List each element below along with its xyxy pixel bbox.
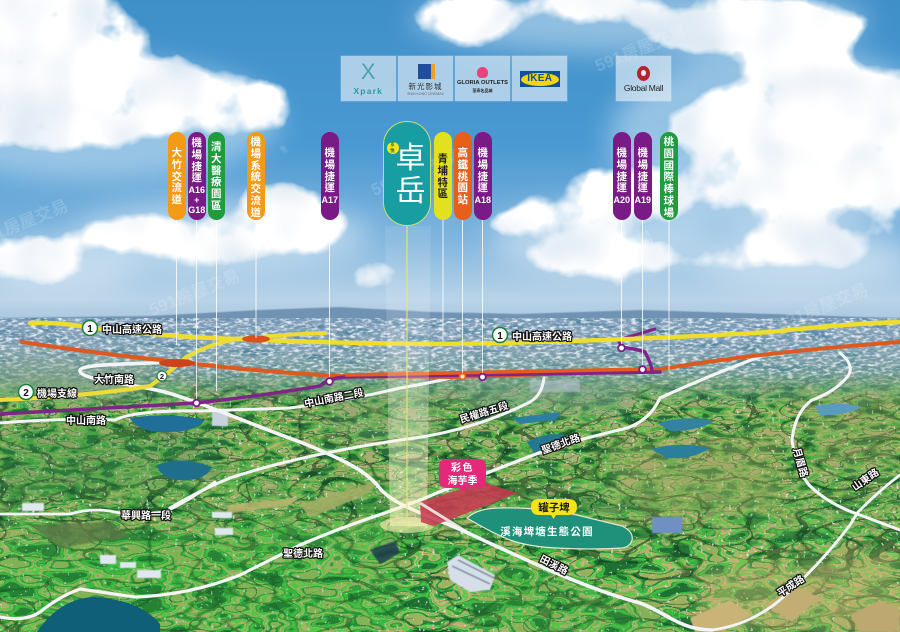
label: 機場捷運 A16+G18: 機 [192, 137, 202, 149]
label: 大竹交流道: 交 [172, 171, 182, 183]
label: 機場捷運 A19: 機 [638, 147, 648, 159]
label: 機場捷運 A16+G18: A16 [188, 185, 205, 195]
interchange ovals [242, 335, 270, 343]
pond: 溪海埤塘生態公園 [467, 508, 632, 549]
road: 月眉路 [792, 353, 900, 530]
freeway shield 2 left: 2 [23, 388, 29, 399]
label: 機場系統交流道 [247, 132, 264, 220]
logo: Gloria Outlets [455, 56, 510, 101]
clouds [0, 0, 900, 291]
label: 桃園國際棒球場: 際 [664, 171, 674, 183]
label: 機場捷運 A17: 運 [324, 182, 335, 194]
label: 機場捷運 A17: 場 [324, 159, 335, 171]
freeway shield 1 left [82, 320, 98, 336]
light beam from the project [385, 226, 431, 526]
watermarks: 591房屋交易 [180, 77, 277, 132]
watermarks: 591房屋交易 [560, 227, 657, 282]
road labels: 機場支線 [37, 387, 77, 400]
label: 機場捷運 A18: A18 [474, 195, 491, 205]
label: 機場系統交流道: 機 [250, 136, 261, 148]
road labels: 山東路 [849, 466, 881, 493]
label: 機場捷運 A16+G18: + [194, 195, 199, 205]
label: 機場捷運 A17: A17 [321, 195, 338, 205]
label: 桃園國際棒球場: 桃 [664, 136, 674, 148]
road labels [37, 323, 881, 600]
label: 清大醫療園區: 大 [211, 153, 222, 165]
freeway shield 1 left: 1 [87, 324, 93, 335]
project name [396, 142, 426, 208]
label: 機場捷運 A17: 捷 [324, 171, 335, 183]
freeway shield 1 right [492, 328, 508, 342]
sky [0, 0, 900, 322]
label: 機場捷運 A19: 運 [638, 182, 648, 194]
badge: 京 [390, 142, 395, 147]
label: 桃園國際棒球場: 園 [664, 148, 674, 160]
label: 青埔特區: 青 [438, 153, 448, 165]
label: 清大醫療園區: 園 [211, 188, 222, 200]
freeway shield 2 left [18, 384, 34, 400]
road: 大竹南路 and 田溪路 [80, 362, 712, 630]
logo: Xpark: X [361, 59, 376, 84]
label: 機場系統交流道: 場 [250, 148, 261, 160]
buildings [22, 380, 682, 592]
badge [386, 142, 398, 154]
freeway shield 2 small: 2 [160, 372, 164, 381]
road labels: 聖德北路 [283, 547, 323, 560]
logo: Global Mall: Global Mall [624, 83, 663, 93]
logo: 新光影城: SHIN KONG CINEMAS [407, 92, 444, 96]
label: 機場系統交流道: 系 [250, 160, 261, 172]
label: 大竹交流道: 流 [172, 182, 182, 194]
label: 清大醫療園區 [208, 132, 225, 220]
label: 大竹交流道 [168, 132, 186, 220]
freeway shield 1 right: 1 [497, 331, 503, 342]
label: 機場捷運 A16+G18: 場 [192, 149, 202, 161]
distant mountains [0, 307, 900, 326]
label: 機場捷運 A17: 機 [324, 147, 335, 159]
label: 桃園國際棒球場: 場 [664, 207, 674, 219]
label: 桃園國際棒球場 [660, 132, 678, 220]
field boundaries and tree lines [0, 372, 900, 632]
road labels: 聖德北路 [540, 431, 582, 457]
road labels: 月眉路 [790, 446, 811, 479]
label: 青埔特區: 特 [438, 177, 448, 189]
ponds [37, 404, 862, 632]
logo: Global Mall [616, 56, 671, 101]
label: 機場捷運 A19: 場 [638, 159, 648, 171]
logo: 新光影城: 新光影城 [408, 82, 442, 91]
label: 機場捷運 A18: 機 [478, 147, 488, 159]
badge: 悅 [390, 148, 395, 152]
high speed rail line [22, 342, 900, 377]
label: 機場捷運 A17 [321, 132, 338, 220]
road labels: 華興路一段 [121, 509, 171, 522]
watermarks: 591房屋交易 [774, 279, 871, 334]
watermarks: 591房屋交易 [784, 101, 881, 156]
label: 大竹交流道: 大 [172, 147, 182, 159]
airport MRT line [0, 329, 660, 414]
white roads [0, 353, 900, 630]
leader line: project [406, 226, 408, 525]
label: 機場系統交流道: 統 [250, 171, 261, 183]
label: 機場捷運 A16+G18: G18 [188, 205, 205, 215]
label: 機場捷運 A19: 捷 [638, 171, 648, 183]
road labels: 中山南路 [66, 414, 106, 427]
scattered buildings [0, 372, 900, 632]
label: 機場捷運 A18: 運 [478, 182, 488, 194]
road labels: 民權路五段 [458, 399, 510, 426]
individual fields [30, 480, 900, 632]
project pill: 卓岳 [383, 121, 431, 226]
label: 大竹交流道: 竹 [172, 159, 182, 171]
label: 機場捷運 A20: 機 [616, 147, 627, 159]
project name: 卓 [396, 142, 426, 175]
broad land tone patches [0, 358, 900, 632]
pond: 溪海埤塘生態公園: 溪海埤塘生態公園 [500, 525, 594, 538]
label: 機場捷運 A16+G18 [188, 132, 206, 220]
logo: 新光影城 [398, 56, 453, 101]
watermarks: 591房屋交易 [146, 265, 243, 320]
leader lines [176, 220, 669, 402]
road: 中山南路 [0, 378, 450, 423]
label: 高鐵桃園站: 桃 [458, 171, 468, 183]
road labels: 田溪路 [538, 552, 570, 577]
road: 民權路 [170, 378, 544, 508]
logo: Xpark [340, 56, 396, 101]
road labels: 平成路 [775, 572, 807, 600]
label: 清大醫療園區: 區 [211, 200, 222, 212]
logo: Xpark: Xpark [353, 86, 383, 96]
label: 機場捷運 A18: 場 [478, 159, 488, 171]
label: 青埔特區 [434, 132, 452, 220]
label: 機場捷運 A20: A20 [613, 195, 630, 205]
label: 機場捷運 A18: 捷 [478, 171, 488, 183]
watermarks [0, 11, 881, 334]
label: 機場捷運 A19: A19 [634, 195, 651, 205]
label: 清大醫療園區: 療 [211, 176, 222, 188]
sea taro festival area [420, 482, 517, 526]
freeway shield 2 small [157, 371, 167, 381]
label: 機場捷運 A16+G18: 運 [192, 172, 202, 184]
road: 聖德北路 [0, 353, 770, 619]
label: 機場捷運 A20: 捷 [616, 171, 627, 183]
label: 清大醫療園區: 清 [211, 141, 222, 153]
label: 機場捷運 A19 [634, 132, 652, 220]
label: 桃園國際棒球場: 球 [664, 195, 674, 207]
near field mosaic [0, 460, 900, 632]
road labels: 中山高速公路 [102, 323, 162, 336]
label: 機場捷運 A20: 場 [616, 159, 627, 171]
label: 大竹交流道: 道 [172, 194, 182, 206]
freeway 2 airport branch [0, 333, 325, 400]
road labels: 中山南路二段 [303, 386, 364, 410]
label: 高鐵桃園站: 園 [458, 182, 468, 194]
far city texture [0, 318, 900, 403]
callout: 彩色海芋季: 海芋季 [448, 474, 478, 487]
label: 高鐵桃園站: 站 [458, 194, 468, 206]
watermarks: 591房屋交易 [368, 145, 465, 200]
callout: 彩色海芋季: 彩色 [451, 461, 474, 474]
label: 青埔特區: 埔 [438, 165, 448, 177]
label: 機場系統交流道: 流 [250, 195, 261, 207]
logo: Gloria Outlets: 華泰名品城 [472, 88, 492, 93]
road: 華興路 [0, 482, 215, 514]
callout: 罐子埤: 罐子埤 [538, 501, 570, 514]
label: 桃園國際棒球場: 棒 [664, 183, 674, 195]
label: 機場系統交流道: 交 [250, 183, 261, 195]
callout: 彩色海芋季 [439, 459, 486, 492]
road labels: 大竹南路 [94, 373, 134, 386]
label: 清大醫療園區: 醫 [211, 165, 222, 177]
watermarks: 591房屋交易 [592, 21, 689, 76]
callout: 罐子埤 [531, 499, 577, 519]
label: 機場系統交流道: 道 [250, 207, 261, 219]
freeway 1 [30, 322, 900, 344]
label: 桃園國際棒球場: 國 [664, 160, 674, 172]
logo: IKEA: IKEA [527, 73, 552, 84]
project name: 岳 [396, 175, 426, 208]
road: 平成路 and 山東路 [712, 475, 900, 630]
label: 機場捷運 A16+G18: 捷 [192, 161, 202, 173]
middle distance field mosaic [0, 374, 900, 555]
label: 機場捷運 A18 [474, 132, 492, 220]
station markers [193, 345, 646, 406]
logo: Gloria Outlets: GLORIA OUTLETS [457, 80, 508, 86]
label: 青埔特區: 區 [438, 188, 448, 200]
label: 機場捷運 A20: 運 [616, 182, 627, 194]
logo: IKEA [512, 56, 567, 101]
label: 高鐵桃園站: 高 [458, 147, 468, 159]
land base [0, 318, 900, 632]
label: 高鐵桃園站: 鐵 [458, 159, 468, 171]
label: 機場捷運 A20 [613, 132, 630, 220]
label: 高鐵桃園站 [454, 132, 472, 220]
road labels: 中山高速公路 [512, 330, 572, 343]
